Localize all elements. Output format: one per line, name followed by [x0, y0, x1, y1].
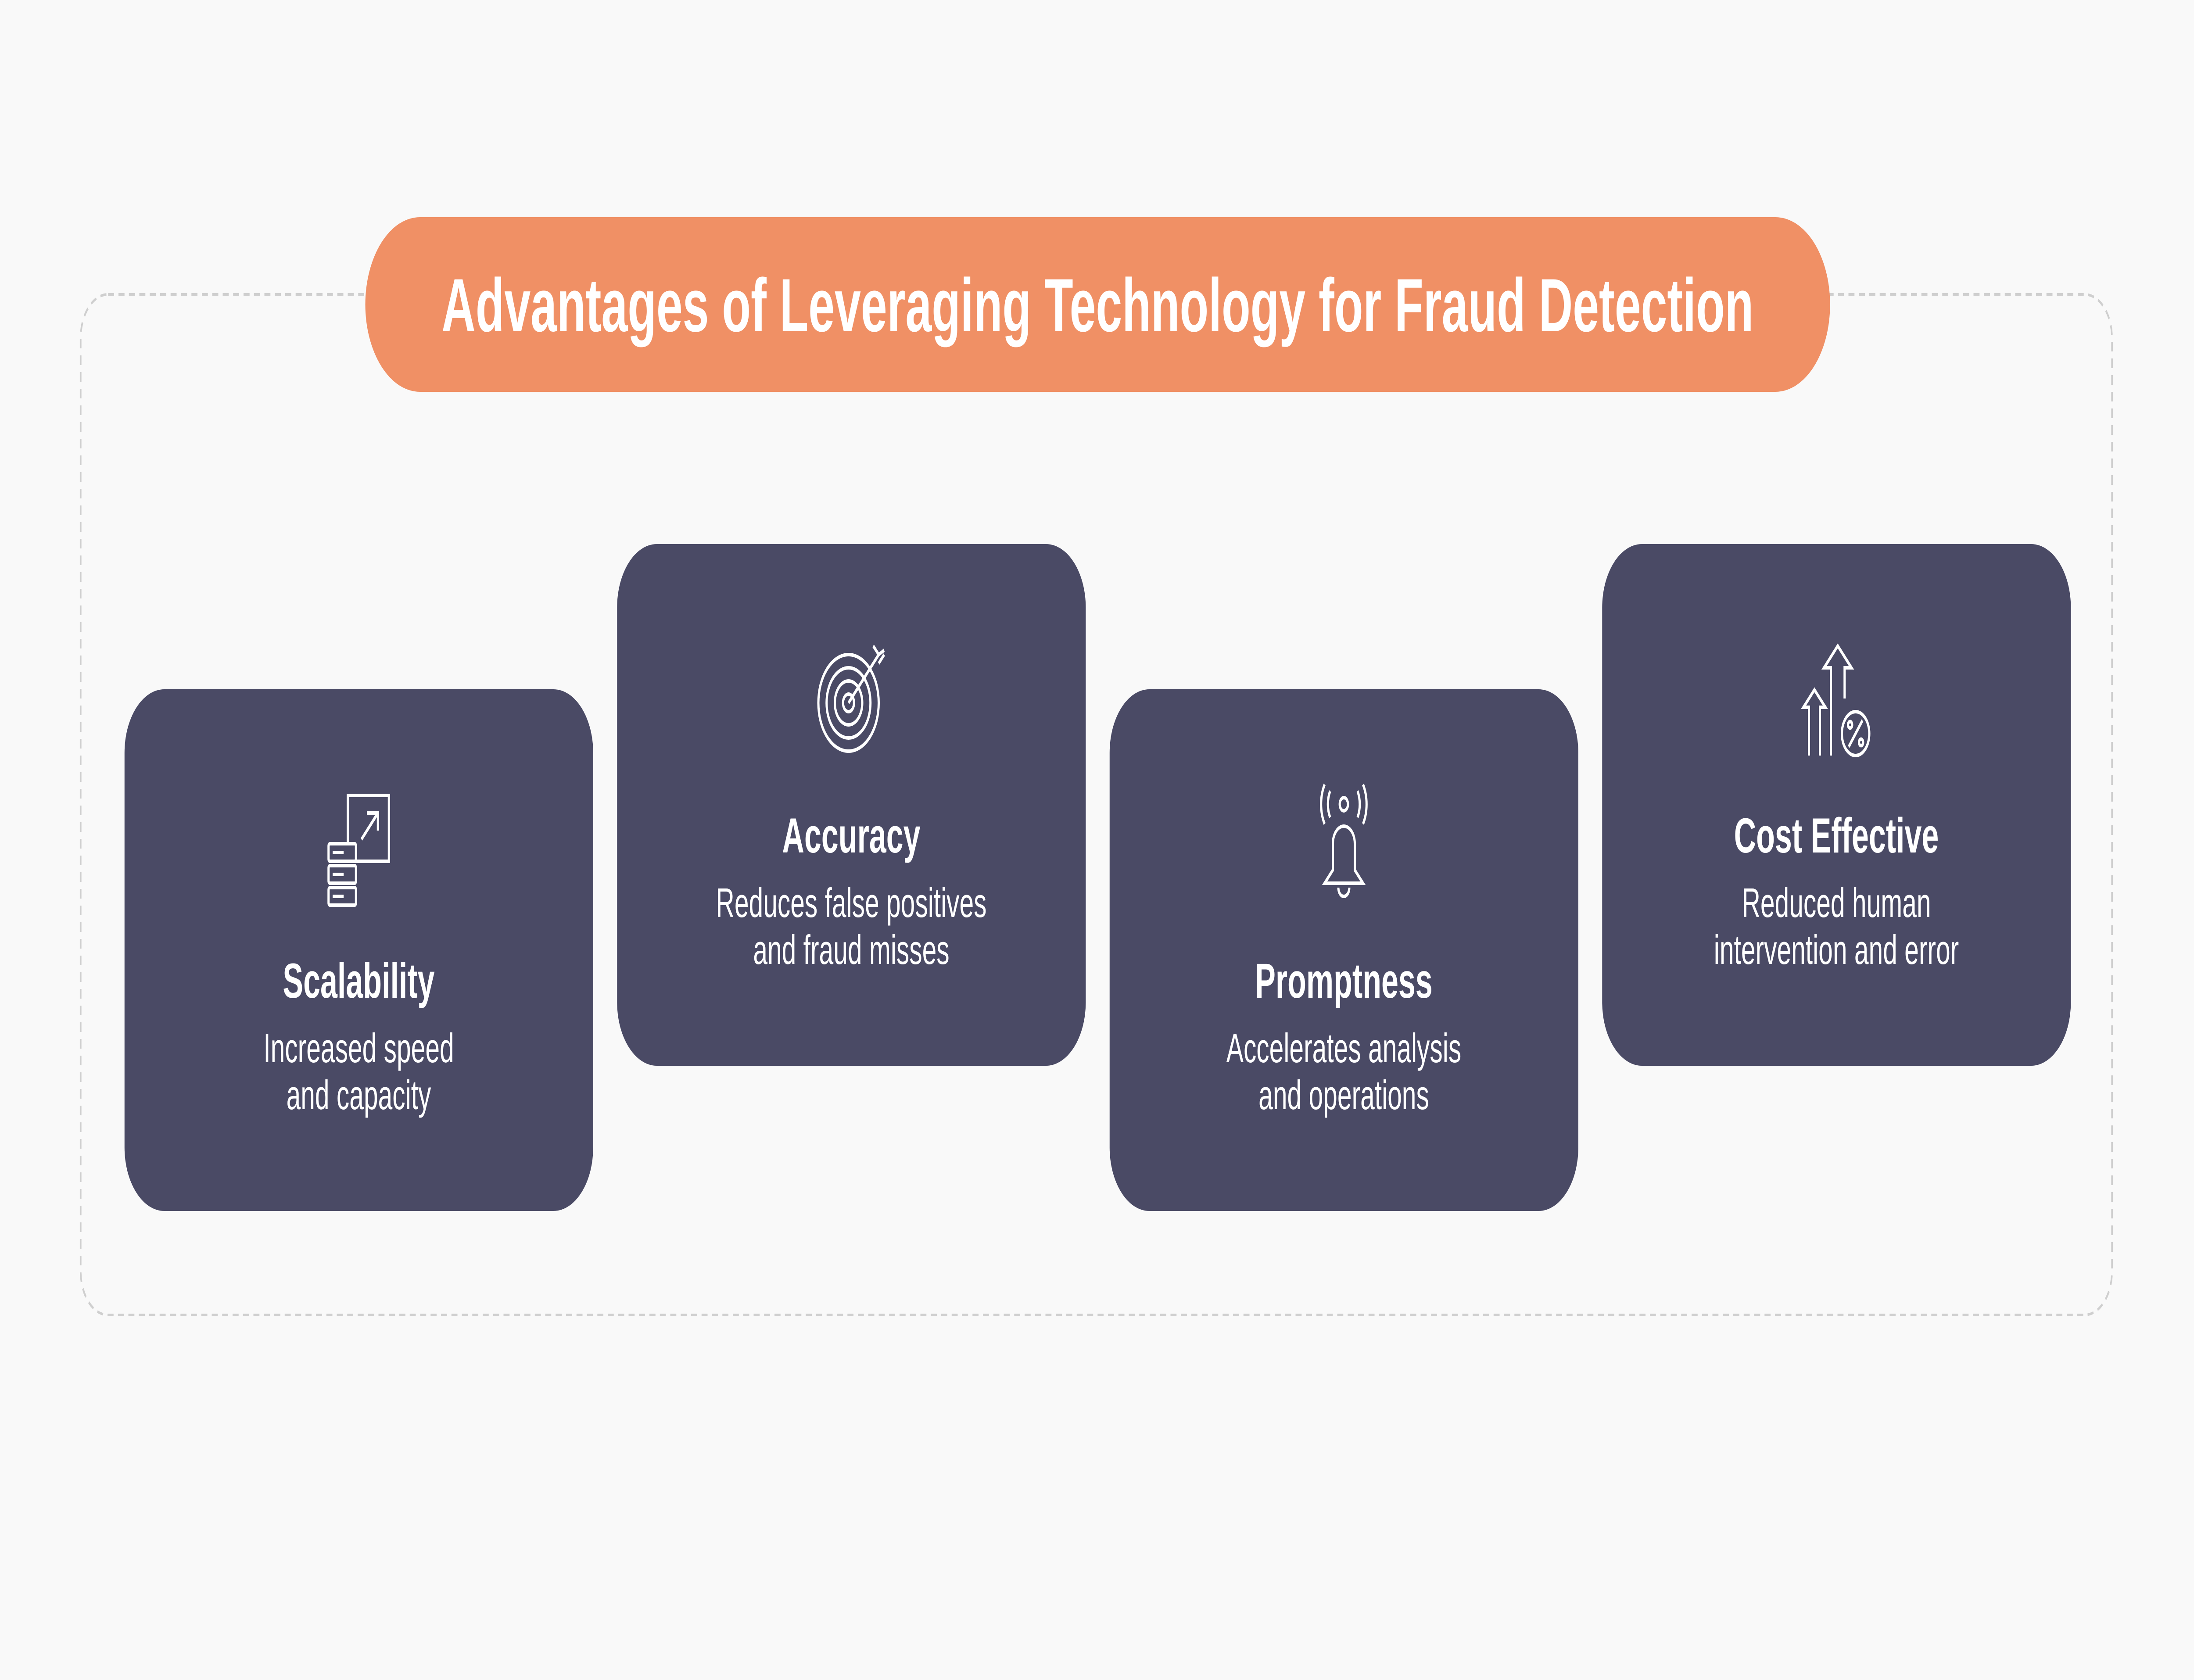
description: Reduced human — [1742, 880, 1931, 926]
icon: arrows up with percent — [1803, 646, 1869, 756]
icon: servers with expand arrow — [329, 795, 389, 905]
description: Increased speed — [263, 1025, 454, 1071]
heading: Cost Effective — [1734, 808, 1939, 863]
heading: Scalability — [283, 953, 435, 1008]
card: accuracy — [617, 544, 1086, 1066]
card: promptness — [1110, 689, 1578, 1211]
card: scalability: and capacity — [287, 1072, 431, 1118]
card: cost effective — [1602, 544, 2071, 1066]
description: Reduces false positives — [716, 880, 987, 926]
heading: Promptness — [1255, 953, 1433, 1008]
card: accuracy: and fraud misses — [753, 927, 950, 973]
heading: Accuracy — [782, 808, 921, 863]
title: Advantages of Leveraging Technology for Fraud Detection — [441, 263, 1753, 347]
card: cost effective: intervention and error — [1714, 927, 1959, 973]
icon: target — [818, 646, 884, 751]
card: promptness: and operations — [1258, 1072, 1429, 1118]
card: scalability — [125, 689, 593, 1211]
description: Accelerates analysis — [1226, 1025, 1461, 1071]
icon: bell — [1321, 784, 1366, 896]
title — [365, 217, 1830, 392]
